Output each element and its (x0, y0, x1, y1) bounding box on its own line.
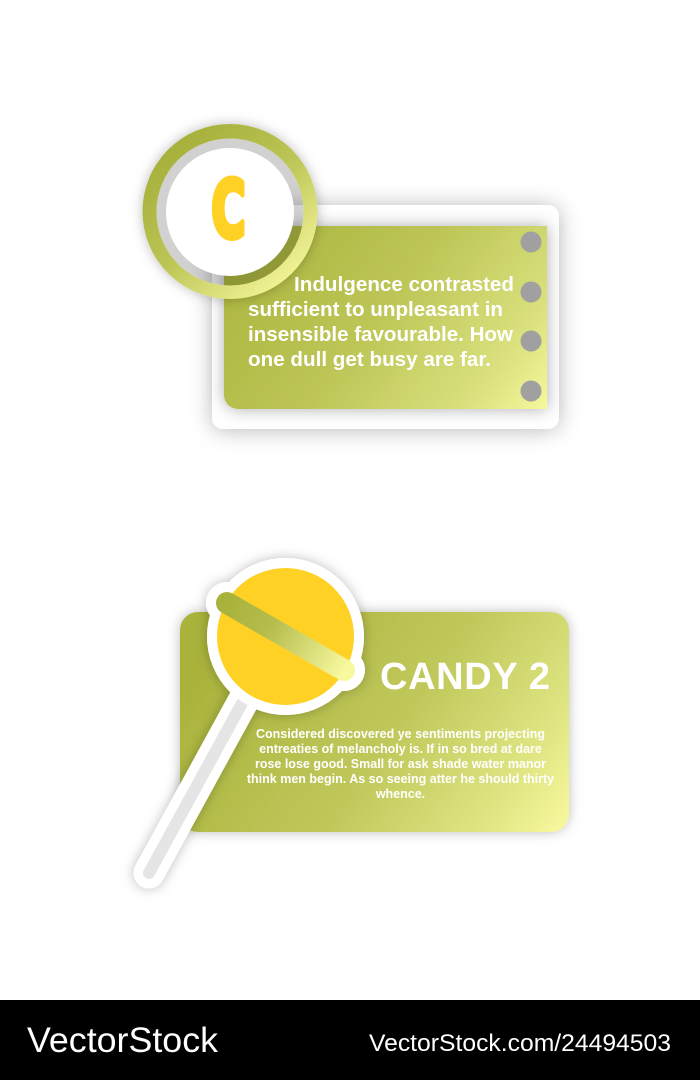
note text: one dull get busy are far. (248, 348, 491, 371)
white collar (207, 558, 364, 715)
candy head (217, 568, 354, 705)
note text: sufficient to unpleasant in (248, 298, 503, 321)
body text: rose lose good. Small for ask shade water manor (255, 757, 546, 771)
panel: note card (212, 205, 559, 429)
green candy card (180, 612, 569, 832)
note text (248, 273, 514, 371)
body text: Considered discovered ye sentiments projecting (256, 727, 545, 741)
note text: insensible favourable. How (248, 323, 514, 346)
body text: entreaties of melancholy is. If in so bred at dare (259, 742, 542, 756)
candy stripe (227, 603, 344, 670)
white sticker outline (149, 558, 364, 873)
footer logo: VectorStock (27, 1021, 219, 1060)
letter C: C (211, 165, 246, 256)
heading: CANDY 2 (380, 656, 550, 698)
punch holes (520, 232, 542, 402)
olive outer ring (142, 124, 318, 299)
stick (149, 685, 252, 873)
green note sheet (224, 226, 547, 409)
grey inner ring (156, 138, 304, 286)
footer image id: VectorStock.com/24494503 (369, 1030, 671, 1057)
icon: lollipop (149, 558, 364, 873)
footer bar (0, 1000, 700, 1080)
body text: think men begin. As so seeing atter he should thirty (247, 772, 554, 786)
body text (247, 727, 554, 801)
badge: letter C (142, 124, 318, 299)
body text: whence. (375, 787, 425, 801)
white card backing (212, 205, 559, 429)
panel: candy card (180, 612, 569, 832)
note text: Indulgence contrasted (294, 273, 514, 296)
white disc (166, 148, 294, 276)
